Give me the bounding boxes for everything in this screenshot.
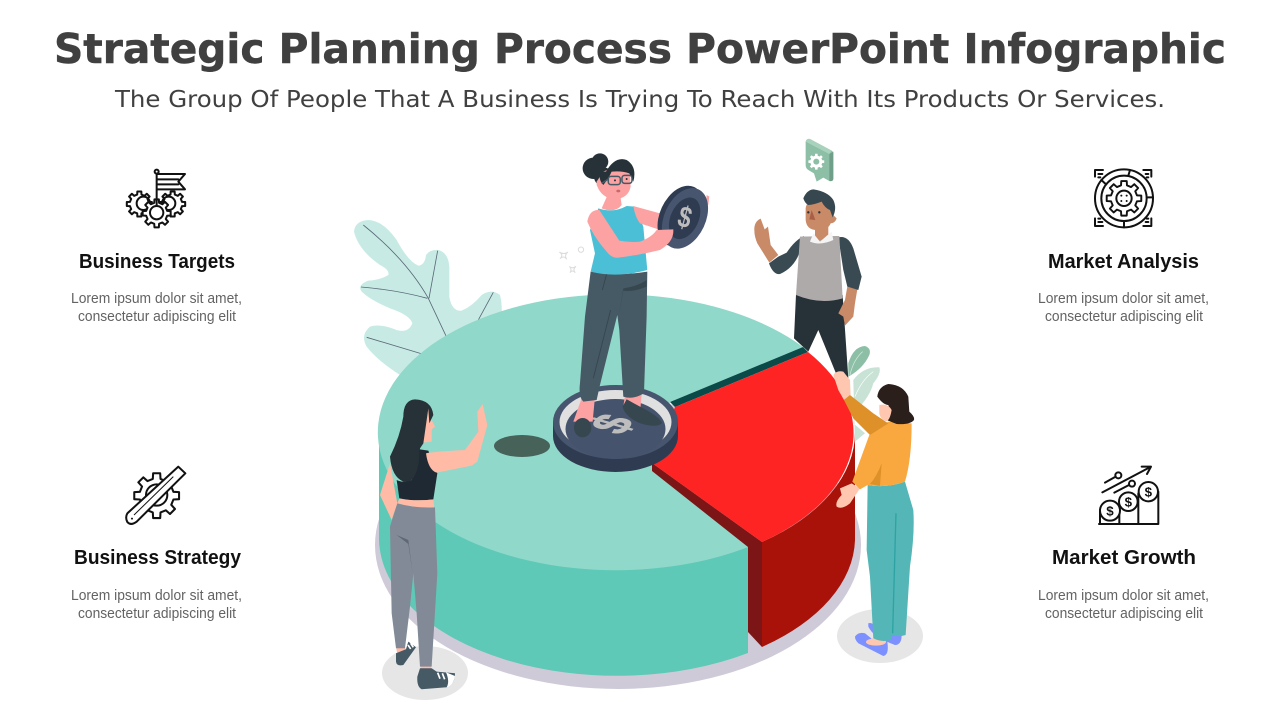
large coin on pie: $: [580, 409, 647, 439]
heading: Market Analysis: [1048, 251, 1199, 273]
figure: woman on left: [380, 399, 487, 689]
held coin: $: [674, 199, 695, 235]
icon: coins and growth arrow: $: [1145, 484, 1153, 499]
icon: large background leaf: [354, 220, 502, 397]
icon: gears with flag: [127, 170, 185, 227]
text block: consectetur adipiscing elit: [1045, 309, 1203, 325]
icon: speech bubble with gear: [806, 139, 833, 182]
neck and head: [602, 193, 622, 210]
trousers: [580, 272, 647, 402]
text block: consectetur adipiscing elit: [78, 606, 236, 622]
heading: Market Growth: [1052, 547, 1196, 569]
text block: consectetur adipiscing elit: [1045, 606, 1203, 622]
panel: market growth: [1038, 467, 1209, 622]
ground shadow: right woman: [837, 609, 923, 663]
icon: small leaves behind right woman: [848, 346, 880, 442]
held coin: [648, 178, 717, 256]
text block: Lorem ipsum dolor sit amet,: [71, 291, 242, 307]
ground shadow: left woman: [382, 646, 468, 700]
red segment side: [762, 432, 855, 647]
platform shadow: [375, 401, 861, 689]
panel: business strategy: [71, 467, 242, 622]
subtitle: The Group Of People That A Business Is Trying To Reach With Its Products Or Services.: [114, 85, 1165, 113]
red segment top: [652, 352, 854, 542]
panel: business targets: [71, 170, 242, 325]
green segment top: [378, 294, 803, 570]
pie chart: [378, 294, 855, 676]
text block: [71, 588, 242, 622]
sparkles: [559, 247, 584, 273]
figure: woman with coin: [559, 153, 717, 437]
icon: gear and wrench: [126, 467, 185, 524]
large coin on pie: [553, 385, 678, 472]
panel: market analysis: [1038, 169, 1209, 325]
ankles and shoes: [573, 397, 595, 422]
text block: [1038, 588, 1209, 622]
text block: [71, 291, 242, 325]
title: Strategic Planning Process PowerPoint Infographic: [54, 25, 1226, 73]
text block: [1038, 291, 1209, 325]
heading: Business Strategy: [74, 547, 242, 569]
heading: Business Targets: [79, 251, 235, 273]
torso: [590, 206, 647, 275]
text block: Lorem ipsum dolor sit amet,: [1038, 588, 1209, 604]
green segment side: [379, 432, 748, 676]
dark spot: [494, 435, 550, 457]
near arm: [587, 210, 673, 258]
dark segment divider: [670, 347, 808, 407]
icon: coins and growth arrow: $: [1125, 494, 1133, 509]
icon: coins and growth arrow: $: [1106, 503, 1114, 518]
text block: Lorem ipsum dolor sit amet,: [1038, 291, 1209, 307]
red segment cut face: [652, 463, 762, 647]
far arm: [706, 195, 709, 205]
figure: woman on right: [833, 371, 914, 656]
icon: coins and growth arrow: [1099, 467, 1158, 524]
text block: Lorem ipsum dolor sit amet,: [71, 588, 242, 604]
icon: gear target: [1095, 169, 1153, 227]
figure: man in vest: [754, 139, 862, 378]
text block: consectetur adipiscing elit: [78, 309, 236, 325]
